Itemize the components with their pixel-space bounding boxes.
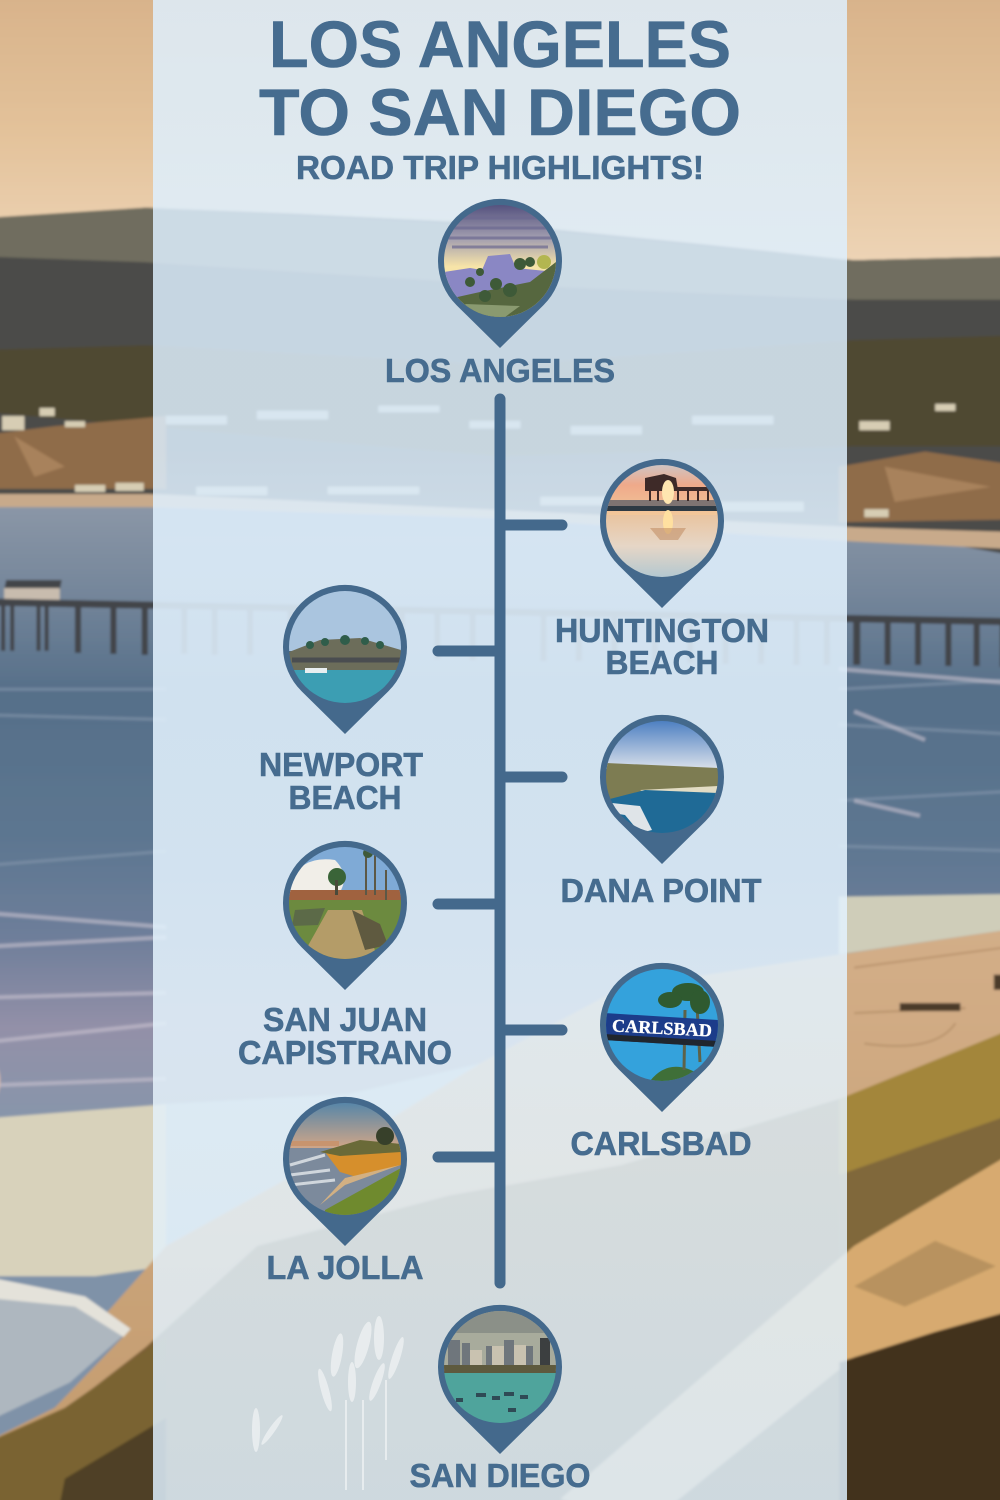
stop: La Jolla [283,1097,407,1246]
label: Newport Beach [259,746,423,816]
stop: Dana Point [600,715,724,864]
label: San Juan Capistrano [238,1001,452,1071]
label: San Diego: SAN DIEGO [410,1457,590,1494]
label: La Jolla: LA JOLLA [266,1249,424,1286]
label: Carlsbad: CARLSBAD [570,1125,752,1162]
pampas grass in panel [252,1316,407,1490]
title: TO SAN DIEGO [259,75,741,149]
label: Newport Beach: NEWPORT [259,746,423,783]
stop: Carlsbad [600,963,724,1112]
route timeline with branches [438,399,562,1283]
stop: San Diego [438,1305,562,1454]
translucent central panel [153,0,847,1500]
stop: San Juan Capistrano [283,841,407,990]
label: San Juan Capistrano: SAN JUAN [263,1001,427,1038]
stop: Newport Beach [283,585,407,734]
label: Newport Beach: BEACH [288,779,402,816]
label: Huntington Beach: BEACH [606,644,718,681]
stop: Carlsbad: CARLSBAD [612,1015,712,1041]
label: San Juan Capistrano: CAPISTRANO [238,1034,452,1071]
title [259,7,741,186]
label: Los Angeles: LOS ANGELES [385,352,615,389]
stop: Los Angeles [438,199,562,348]
title: ROAD TRIP HIGHLIGHTS! [296,149,704,186]
stop: Huntington Beach [600,459,724,608]
title: LOS ANGELES [269,7,731,81]
label: Huntington Beach [555,612,769,681]
label: Huntington Beach: HUNTINGTON [555,612,769,649]
label: Dana Point: DANA POINT [560,872,762,909]
